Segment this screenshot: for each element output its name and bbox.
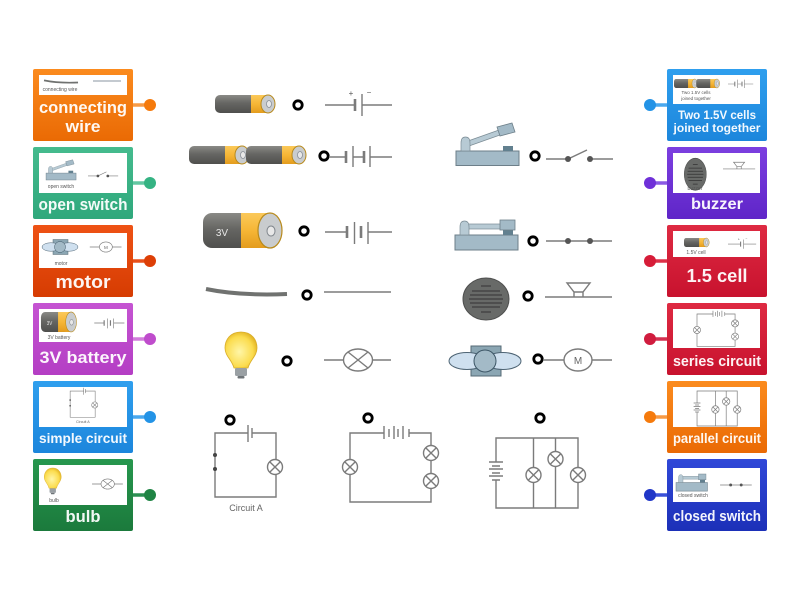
connector dot bbox=[132, 181, 150, 185]
card: 1.5 cell: 1.5 cell bbox=[686, 266, 748, 286]
connector dot bbox=[650, 259, 668, 263]
card: motor: motor bbox=[56, 272, 110, 292]
card: 1.5 cell: 1.5V cell bbox=[686, 250, 706, 256]
card: two 1.5V cells: Two 1.5V cells bbox=[678, 108, 756, 122]
card: closed switch bbox=[644, 459, 767, 531]
card: two 1.5V cells: joined together bbox=[672, 121, 761, 135]
card: parallel circuit bbox=[644, 381, 767, 453]
row: connecting wire bbox=[206, 289, 391, 299]
connector dot bbox=[650, 103, 668, 107]
card: bulb: bulb bbox=[66, 507, 100, 526]
card: buzzer bbox=[644, 147, 767, 219]
card: series circuit: series circuit bbox=[673, 354, 761, 370]
card: bulb: bulb bbox=[49, 498, 59, 504]
card: motor: motor bbox=[55, 261, 68, 267]
connector dot bbox=[132, 415, 150, 419]
card: 3V battery: 3V battery bbox=[40, 348, 127, 367]
card: buzzer: buzzer bbox=[687, 186, 703, 192]
card: bulb bbox=[33, 459, 156, 531]
card: connecting wire: connecting bbox=[39, 98, 127, 117]
connector dot bbox=[132, 493, 150, 497]
card: connecting wire bbox=[33, 69, 156, 141]
connector dot bbox=[650, 415, 668, 419]
card: two 1.5V cells: Two 1.5V cells bbox=[681, 90, 711, 95]
parallel circuit diagram bbox=[489, 414, 586, 508]
connector dot bbox=[650, 337, 668, 341]
card: motor bbox=[33, 225, 156, 297]
card: open switch: open switch bbox=[38, 195, 128, 214]
row: motor bbox=[449, 346, 612, 376]
card: connecting wire: wire bbox=[64, 117, 100, 136]
card: simple circuit: simple circuit bbox=[39, 430, 127, 446]
row: 1.5V cell bbox=[215, 88, 392, 116]
card: parallel circuit: parallel circuit bbox=[673, 431, 761, 446]
row: open switch bbox=[456, 123, 613, 166]
series circuit diagram bbox=[342, 414, 438, 502]
connector dot bbox=[132, 337, 150, 341]
card: two 1.5V cells bbox=[644, 69, 767, 141]
row: closed switch bbox=[455, 220, 612, 250]
card: two 1.5V cells: joined together bbox=[680, 96, 711, 101]
card: 3V battery bbox=[33, 303, 156, 375]
connector dot bbox=[132, 103, 150, 107]
card: closed switch: closed switch bbox=[673, 509, 761, 525]
card: buzzer: buzzer bbox=[691, 196, 743, 213]
card: 1.5 cell bbox=[644, 225, 767, 297]
row: 3V battery bbox=[203, 213, 392, 248]
card: connecting wire: connecting wire bbox=[43, 87, 78, 93]
connector dot bbox=[650, 493, 668, 497]
row: buzzer bbox=[463, 278, 612, 320]
card: 3V battery: 3V battery bbox=[48, 335, 71, 341]
connector dot bbox=[132, 259, 150, 263]
card: open switch: open switch bbox=[48, 184, 74, 190]
row: two cells bbox=[189, 146, 392, 167]
row: bulb bbox=[225, 332, 391, 378]
card: series circuit bbox=[644, 303, 767, 375]
simple circuit diagram bbox=[213, 416, 282, 513]
connector dot bbox=[650, 181, 668, 185]
card: closed switch: closed switch bbox=[678, 493, 708, 499]
card: open switch bbox=[33, 147, 156, 219]
card: simple circuit bbox=[33, 381, 156, 453]
